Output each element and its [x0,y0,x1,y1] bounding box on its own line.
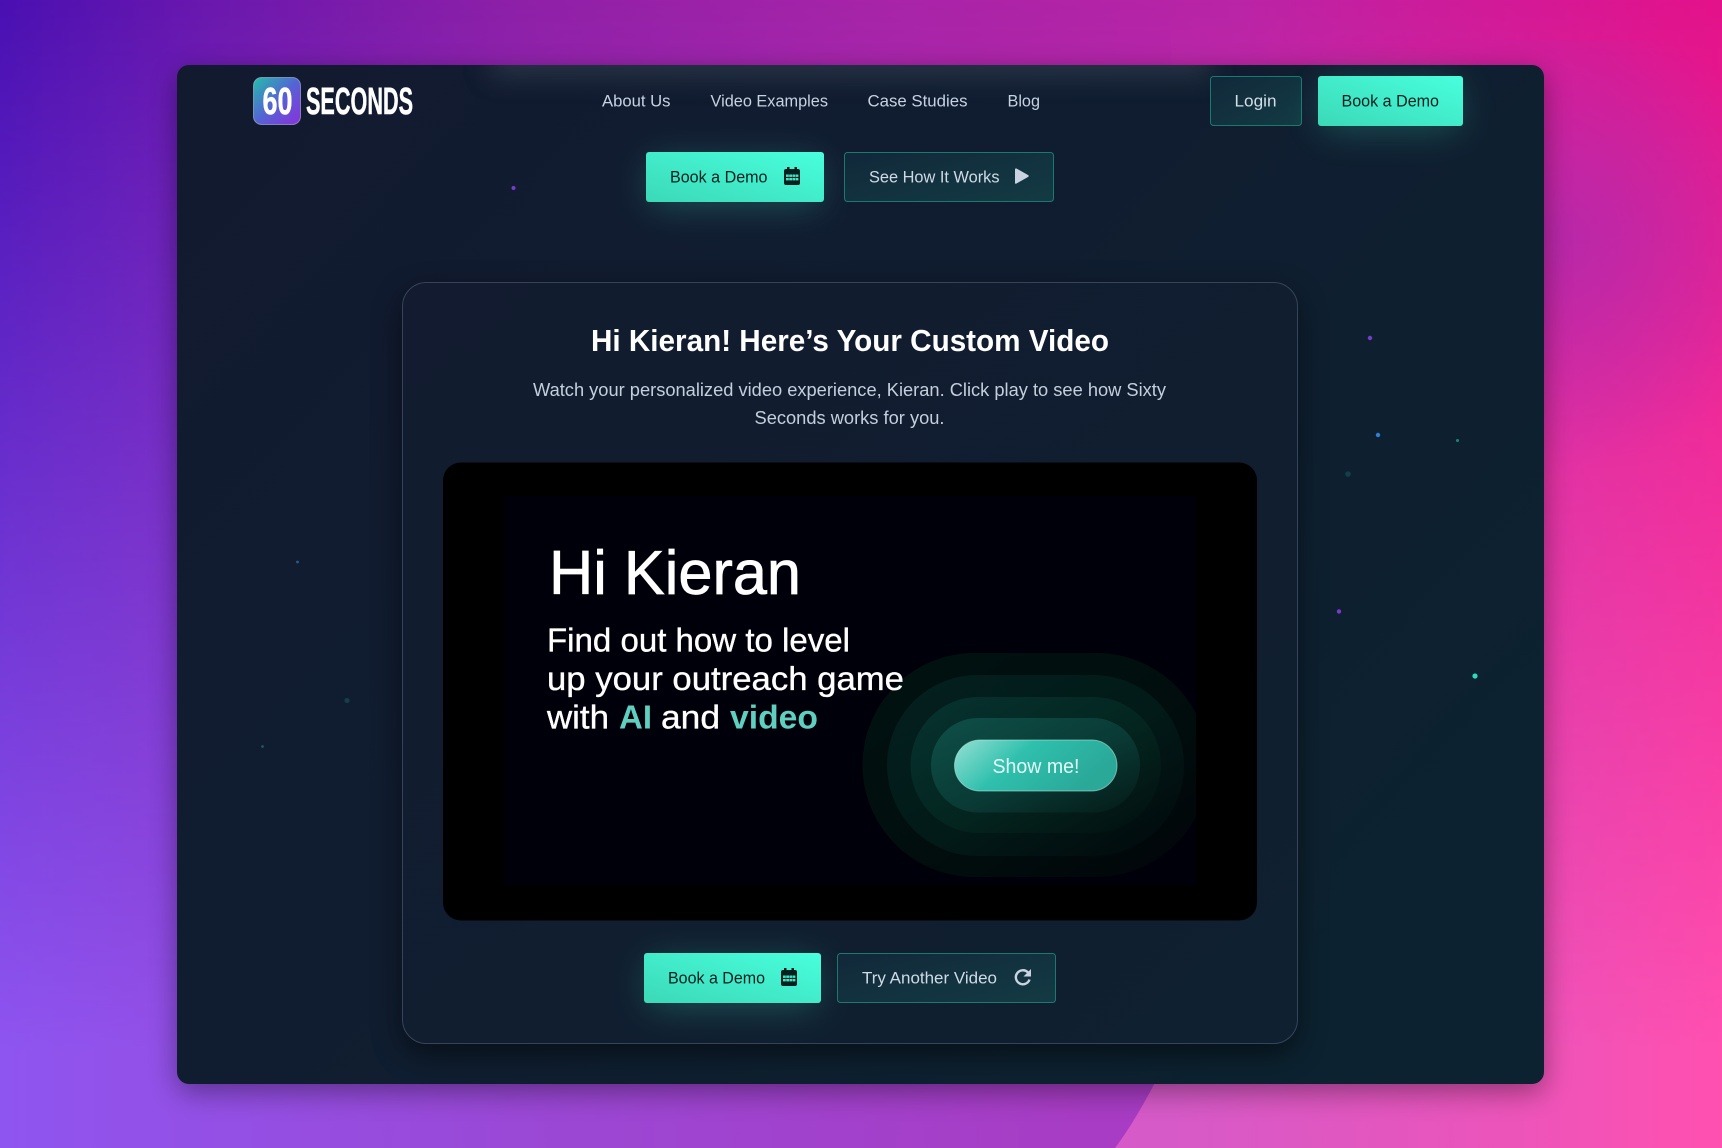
icon: calendar [784,167,800,185]
navigation links [602,92,1040,110]
video greeting: Hi Kieran [549,539,801,608]
login button [1210,76,1302,126]
nav: Case Studies: Case Studies [868,92,968,110]
video tagline: and [661,698,720,736]
app window [177,50,1544,1092]
see how it works button [844,152,1054,202]
card description [533,380,1166,428]
icon: refresh [1016,969,1031,984]
logo wordmark: SECONDS [306,81,413,123]
video player [443,462,1257,920]
nav book a demo button: Book a Demo [1342,92,1439,110]
card description: Watch your personalized video experience, Kieran. Click play to see how Sixty [533,380,1166,400]
hero book a demo button [646,152,824,206]
video tagline: Find out how to level [547,622,850,658]
video tagline: AI [619,698,652,736]
show me button with glow rings: Show me! [992,756,1080,778]
logo badge [254,78,300,124]
video frame [504,496,1196,885]
video tagline: video [730,698,818,736]
video tagline [546,622,904,736]
card book a demo button: Book a Demo [668,970,765,988]
hero book a demo button: Book a Demo [670,168,768,186]
nav: Blog: Blog [1008,92,1040,110]
icon: calendar [781,968,797,986]
nav: Video Examples: Video Examples [710,92,828,110]
nav book a demo button [1318,76,1463,130]
icon: play [1015,168,1029,184]
logo number: 60 [262,81,292,123]
try another video button [838,954,1056,1002]
card book a demo button [644,953,821,1007]
nav: About Us: About Us [602,92,670,110]
try another video button: Try Another Video [862,970,997,988]
card heading: Hi Kieran! Here’s Your Custom Video [591,324,1109,358]
main video card [402,282,1298,1054]
show me button with glow rings [862,653,1208,877]
card description: Seconds works for you. [754,408,944,428]
logo [254,78,413,124]
login button: Login [1234,92,1276,110]
see how it works button: See How It Works [869,168,1000,186]
particle dots [261,186,1478,748]
video tagline: with [546,698,609,736]
video tagline: up your outreach game [547,660,904,697]
